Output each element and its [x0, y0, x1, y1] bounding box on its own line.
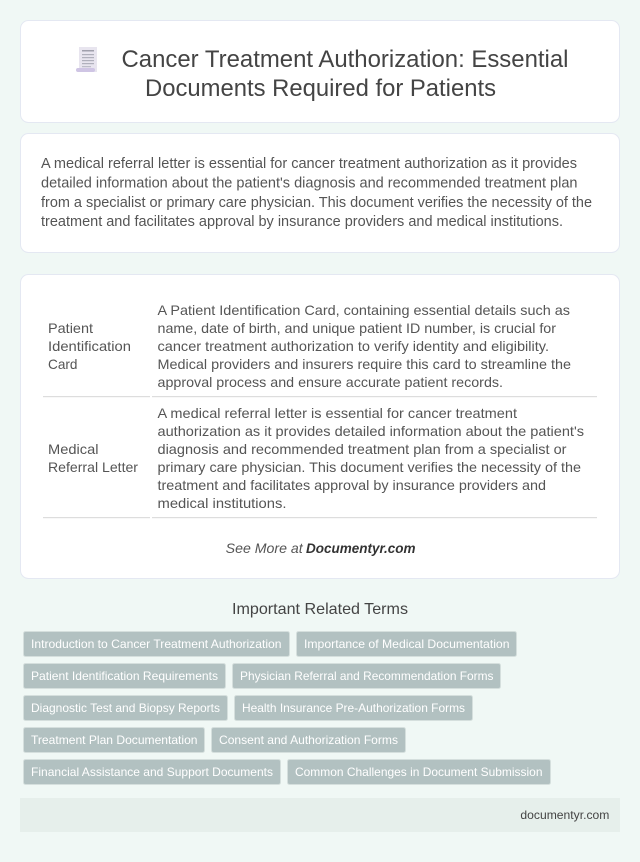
icon: document scroll — [76, 47, 97, 72]
related term tags: Importance of Medical Documentation — [304, 637, 510, 651]
row: medical referral letter: primary care physician. This document verifies the necessity of the — [158, 459, 581, 475]
heading: important related terms: Important Related Terms — [232, 601, 408, 618]
summary text: A medical referral letter is essential for cancer treatment authorization as it provides — [41, 156, 577, 172]
panel: documents table — [20, 274, 620, 578]
see more link: See More at — [226, 540, 304, 556]
summary text: from a specialist or primary care physician. This document verifies the necessity of the — [41, 195, 592, 211]
row: patient identification card: Identification — [48, 338, 131, 354]
title: Documents Required for Patients — [145, 75, 496, 102]
related term tags: Health Insurance Pre-Authorization Forms — [242, 701, 465, 715]
row: medical referral letter: medical institutions. — [158, 495, 286, 511]
title — [122, 46, 568, 102]
related term tags: Financial Assistance and Support Documents — [31, 765, 273, 779]
panel: summary — [20, 134, 620, 252]
row: patient identification card: approval process and ensure accurate patient records. — [158, 374, 503, 390]
related term tags: Introduction to Cancer Treatment Authorization — [31, 637, 282, 651]
row: patient identification card: Medical providers and insurers require this card to streamline the — [158, 356, 571, 372]
row: patient identification card: name, date of birth, and unique patient ID number, is crucial for — [158, 320, 556, 336]
panel: title card — [20, 20, 620, 122]
footer: documentyr.com — [520, 808, 609, 822]
row: patient identification card — [48, 302, 571, 390]
related term tags: Physician Referral and Recommendation Forms — [240, 669, 494, 683]
footer — [20, 798, 620, 832]
summary text: detailed information about the patient's diagnosis and recommended treatment plan — [41, 175, 578, 191]
related term tags: Treatment Plan Documentation — [31, 733, 198, 747]
row: patient identification card: cancer treatment authorization to verify identity and eligibility. — [158, 338, 549, 354]
row: medical referral letter: authorization as it provides detailed information about the patient's — [158, 423, 584, 439]
row: patient identification card: Card — [48, 356, 78, 372]
row: medical referral letter: Referral Letter — [48, 459, 138, 475]
related term tags: Consent and Authorization Forms — [219, 733, 398, 747]
see more link: Documentyr.com — [306, 540, 416, 556]
related term tags — [24, 632, 550, 784]
title: Cancer Treatment Authorization: Essential — [122, 46, 568, 73]
row: medical referral letter: Medical — [48, 441, 98, 457]
summary text: treatment and facilitates approval by insurance providers and medical institutions. — [41, 214, 563, 230]
row: medical referral letter: diagnosis and recommended treatment plan from a specialist or — [158, 441, 567, 457]
related term tags: Diagnostic Test and Biopsy Reports — [31, 701, 220, 715]
row: medical referral letter: A medical referral letter is essential for cancer treatment — [158, 405, 517, 421]
see more link — [226, 540, 416, 556]
row: medical referral letter — [48, 405, 584, 511]
summary text — [41, 156, 592, 230]
related term tags: Common Challenges in Document Submission — [295, 765, 542, 779]
row: patient identification card: A Patient Identification Card, containing essential details such as — [158, 302, 570, 318]
related term tags: Patient Identification Requirements — [31, 669, 218, 683]
row: medical referral letter: treatment and facilitates approval by insurance providers and — [158, 477, 546, 493]
row: patient identification card: Patient — [48, 320, 93, 336]
